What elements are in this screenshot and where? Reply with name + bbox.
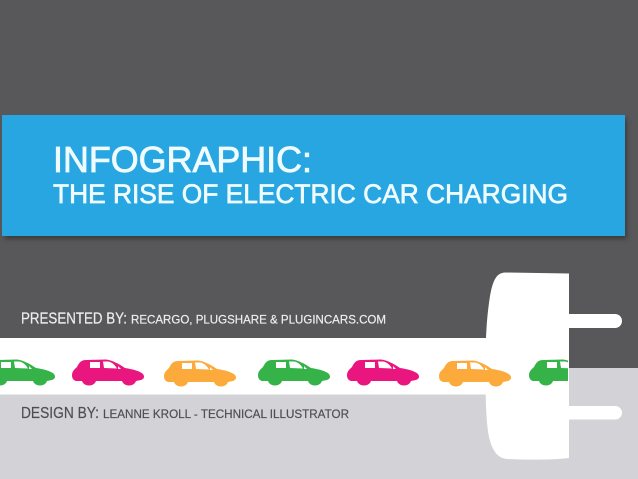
- title banner: [2, 115, 625, 236]
- car: green clipped: [529, 360, 568, 386]
- car: pink: [347, 360, 419, 386]
- light grey lower section: [0, 394, 638, 479]
- banner shadow: [5, 119, 627, 239]
- title: infographic: INFOGRAPHIC:: [53, 139, 312, 180]
- presenters credit: [21, 310, 386, 328]
- subtitle: THE RISE OF ELECTRIC CAR CHARGING: [53, 179, 568, 209]
- car: orange: [164, 360, 236, 386]
- white road band: [0, 338, 500, 394]
- plug prong top: [560, 314, 622, 328]
- presenters credit: PRESENTED BY:: [21, 310, 127, 328]
- car: orange: [439, 360, 511, 386]
- car: green: [258, 360, 330, 386]
- design credit: LEANNE KROLL - TECHNICAL ILLUSTRATOR: [103, 407, 349, 421]
- plug prong bottom: [560, 406, 622, 420]
- car: pink: [72, 360, 144, 386]
- design credit: DESIGN BY:: [21, 405, 99, 422]
- design credit: [21, 405, 349, 422]
- presenters credit: RECARGO, PLUGSHARE & PLUGINCARS.COM: [131, 312, 386, 326]
- car: green: [0, 360, 55, 386]
- plug body: [486, 272, 569, 460]
- icon: plug: [486, 272, 622, 460]
- car row: [0, 360, 601, 386]
